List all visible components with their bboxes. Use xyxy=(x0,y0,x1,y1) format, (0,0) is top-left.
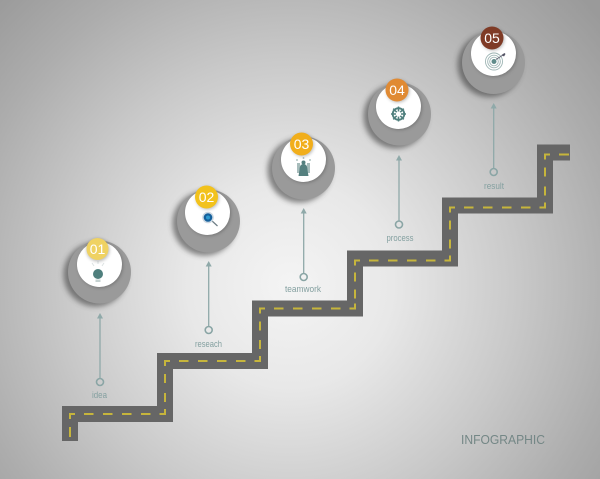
badge: 03: 03 xyxy=(294,136,309,152)
badge: 04: 04 xyxy=(389,82,405,98)
disc: 04 xyxy=(364,82,431,148)
road centre dashes xyxy=(70,154,569,437)
badge: 03 xyxy=(290,132,314,156)
disc: 03 xyxy=(268,136,335,202)
badge: 02: 02 xyxy=(199,189,214,205)
badge: 01: 01 xyxy=(90,241,105,257)
staircase road xyxy=(70,152,570,441)
step 02: reseach xyxy=(172,186,240,350)
badge: 04 xyxy=(386,78,410,102)
disc: 05 xyxy=(458,31,525,97)
arrow: idea xyxy=(96,313,104,386)
badge: 05: 05 xyxy=(484,30,500,46)
arrow: result xyxy=(490,103,497,176)
label: teamwork: teamwork xyxy=(285,284,321,295)
disc: 01 xyxy=(64,240,131,306)
step 04: process xyxy=(364,78,431,244)
badge: 02 xyxy=(195,186,219,210)
title: infographic: INFOGRAPHIC xyxy=(461,433,545,447)
step 01: idea xyxy=(64,238,131,401)
arrow: teamwork xyxy=(300,208,307,280)
arrow: process xyxy=(396,155,402,228)
label: result: result xyxy=(484,181,504,192)
icon: target xyxy=(486,53,506,70)
step 03: teamwork xyxy=(268,132,335,295)
arrow: reseach xyxy=(205,261,212,334)
label: reseach: reseach xyxy=(195,339,222,350)
label: idea: idea xyxy=(92,390,108,401)
icon: team xyxy=(297,157,310,176)
step 05: result xyxy=(458,26,525,192)
badge: 05 xyxy=(480,26,504,50)
icon: light bulb xyxy=(92,261,104,282)
label: process: process xyxy=(386,233,414,244)
disc: 02 xyxy=(172,190,240,256)
road surface xyxy=(70,152,570,441)
badge: 01 xyxy=(86,238,110,262)
icon: magnifier xyxy=(202,212,218,226)
icon: gear xyxy=(391,106,406,122)
